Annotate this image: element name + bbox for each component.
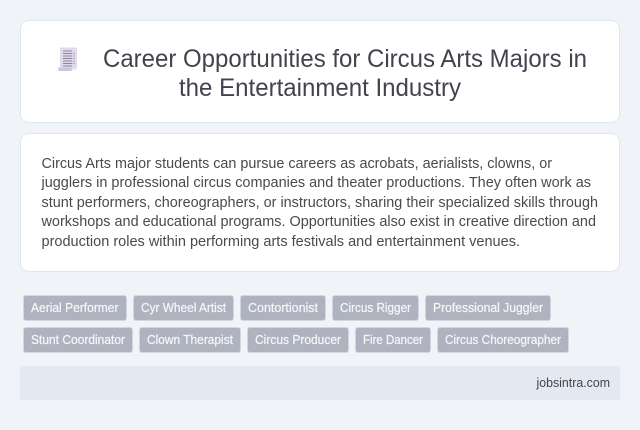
title: the Entertainment Industry — [179, 74, 461, 102]
tag: Cyr Wheel Artist: Cyr Wheel Artist — [141, 300, 226, 315]
title — [103, 45, 587, 102]
tag: Fire Dancer — [356, 328, 430, 352]
panel: title card — [20, 20, 620, 122]
tag: Stunt Coordinator — [24, 328, 132, 352]
tag: Circus Producer: Circus Producer — [255, 332, 342, 347]
panel: description text block: workshops and educational programs. Opportunities also exist in creative direction and — [41, 213, 596, 230]
panel: description text block: production roles within performing arts festivals and entertainment venues. — [42, 233, 520, 250]
panel: description text block: Circus Arts major students can pursue careers as acrobats, aerialists, clowns, or — [42, 155, 552, 172]
tag: Clown Therapist — [140, 328, 240, 352]
panel: description text block: stunt performers, choreographers, or instructors, sharing their specialized skills through — [42, 194, 598, 211]
footer bar: jobsintra.com — [536, 375, 610, 390]
icon: paper scroll — [58, 48, 77, 71]
tag: Cyr Wheel Artist — [134, 296, 234, 320]
tag: Aerial Performer — [24, 296, 126, 320]
tag: Circus Choreographer: Circus Choreographer — [445, 332, 562, 347]
tag list: career titles — [24, 296, 568, 352]
tag: Circus Producer — [248, 328, 348, 352]
tag: Contortionist: Contortionist — [248, 300, 318, 315]
footer bar — [20, 366, 620, 400]
tag: Clown Therapist: Clown Therapist — [147, 332, 233, 347]
tag: Circus Rigger — [332, 296, 418, 320]
panel: description text block: jugglers in professional circus companies and theater productions. They often work as — [41, 174, 591, 191]
tag: Contortionist — [240, 296, 326, 320]
title: Career Opportunities for Circus Arts Majors in — [103, 45, 587, 73]
tag: Fire Dancer: Fire Dancer — [363, 332, 424, 347]
tag: Circus Rigger: Circus Rigger — [340, 300, 412, 315]
tag: Stunt Coordinator: Stunt Coordinator — [31, 332, 126, 347]
tag: Aerial Performer: Aerial Performer — [31, 300, 119, 315]
tag: Professional Juggler: Professional Juggler — [433, 300, 544, 315]
tag: Professional Juggler — [426, 296, 550, 320]
panel: description text block — [20, 134, 620, 272]
tag: Circus Choreographer — [438, 328, 568, 352]
